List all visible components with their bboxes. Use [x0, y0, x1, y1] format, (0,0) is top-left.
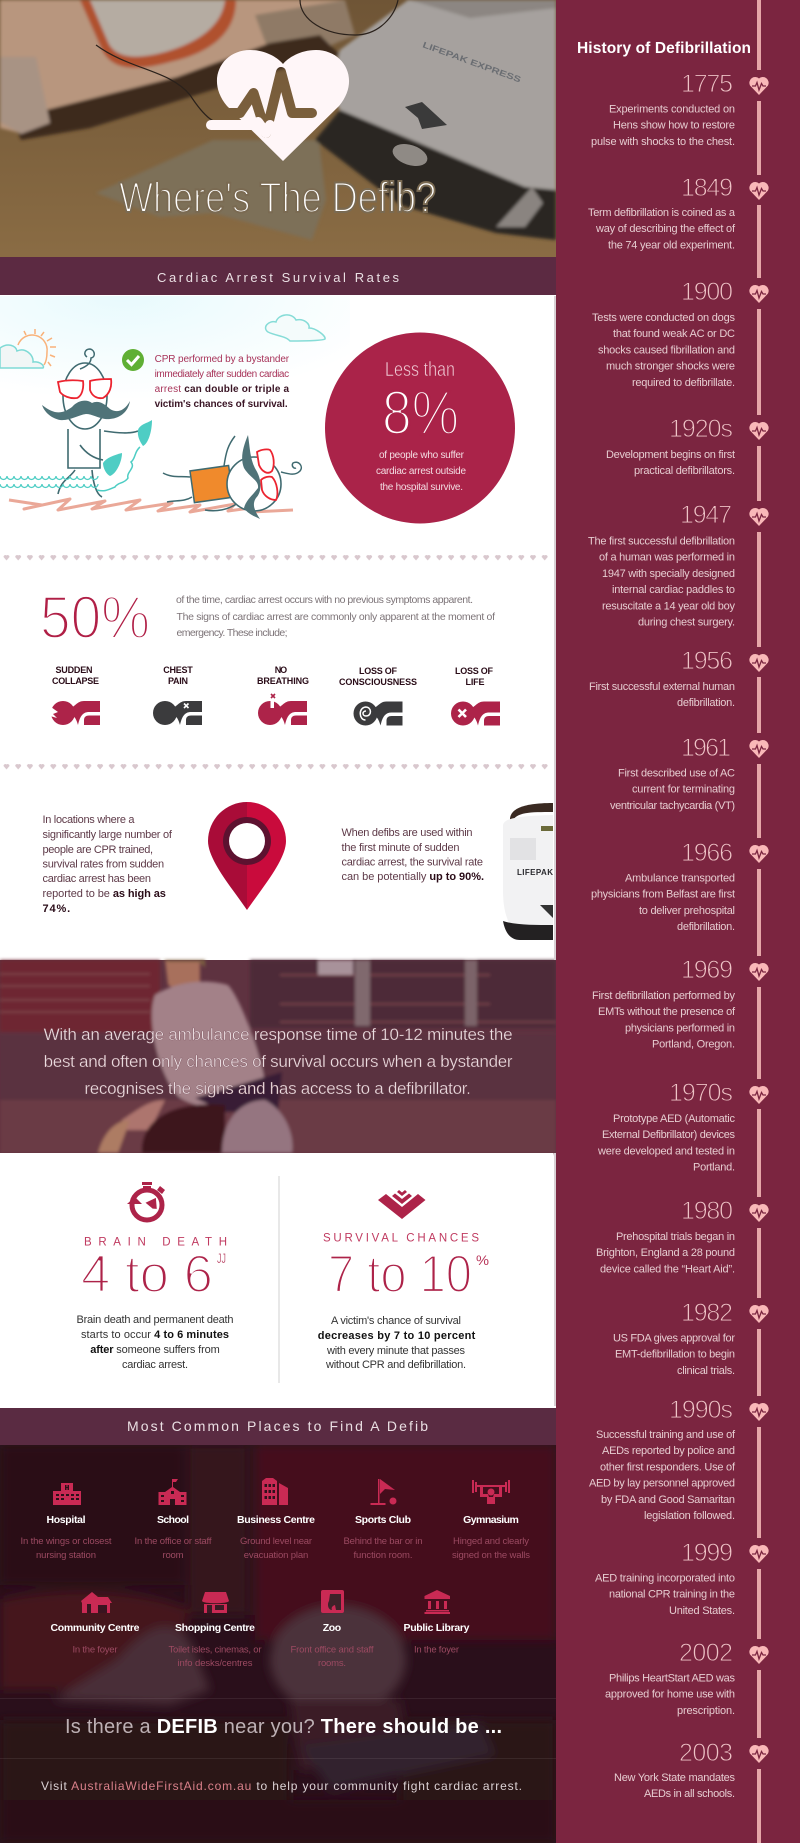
panel: ambulance response time with photo: recognises the signs and has access to a defibrillator. — [84, 1079, 471, 1098]
event: 1980: 1980 — [681, 1197, 733, 1225]
icon: school — [158, 1479, 186, 1505]
text: brain death description: Brain death and permanent death — [76, 1314, 234, 1326]
panel: most common places with photo — [0, 1445, 556, 1843]
text: CPR doubles or triples survival: CPR performed by a bystander — [155, 354, 290, 365]
icon: house — [81, 1592, 112, 1613]
event: 1966: 1966 — [681, 839, 733, 867]
event: 2002: prescription. — [677, 1705, 735, 1717]
event: 1961 — [610, 733, 769, 812]
text: CPR trained locations: cardiac arrest has been — [42, 873, 151, 885]
event: 1969: First defibrillation performed by — [592, 990, 736, 1002]
event: 1956: First successful external human — [589, 681, 735, 693]
event: 2002: approved for home use with — [605, 1689, 735, 1701]
text: CPR trained locations: survival rates from sudden — [42, 858, 164, 870]
event: 1970s: Prototype AED (Automatic — [613, 1113, 736, 1125]
timeline line — [757, 0, 761, 1843]
event: 1947: internal cardiac paddles to — [612, 584, 735, 596]
event: 1920s — [606, 415, 769, 477]
event: 1969: EMTs without the presence of — [598, 1006, 736, 1018]
event: 1961: ventricular tachycardia (VT) — [610, 800, 735, 812]
icon: weightlifter — [472, 1480, 510, 1504]
heading: survival chances: SURVIVAL CHANCES — [323, 1233, 479, 1245]
event: 1775: Experiments conducted on — [609, 104, 735, 116]
stat circle: less than 8% — [325, 332, 515, 524]
panel: survival chances — [278, 1153, 553, 1406]
place: shopping centre: Toilet isles, cinemas, or — [168, 1644, 262, 1656]
stat: 4 to 6: JJ — [217, 1250, 226, 1266]
text: 50 percent description: of the time, cardiac arrest occurs with no previous symptoms apparent. — [176, 594, 473, 606]
heading: brain death: BRAIN DEATH — [84, 1237, 227, 1249]
place: shopping centre: info desks/centres — [178, 1658, 253, 1669]
event: 1920s: Development begins on first — [606, 449, 735, 461]
event: 1970s: Portland. — [693, 1162, 735, 1174]
place: school — [134, 1479, 212, 1561]
event: 1982: 1982 — [681, 1299, 733, 1327]
icon: elephant — [321, 1590, 344, 1613]
place: business centre: evacuation plan — [244, 1550, 308, 1561]
stat circle: less than 8%: cardiac arrest outside — [376, 466, 466, 477]
text: survival chances description: without CPR and defibrillation. — [325, 1359, 466, 1371]
symptom: loss of life: LOSS OF — [455, 666, 494, 676]
place: community centre — [50, 1592, 140, 1656]
place: hospital: In the wings or closest — [20, 1536, 112, 1547]
text: survival chances description: decreases by 7 to 10 percent — [318, 1330, 476, 1342]
stat circle: less than 8%: 8% — [382, 379, 459, 448]
event: 1990s: AEDs reported by police and — [602, 1445, 735, 1457]
event: 1947: of a human was performed in — [599, 552, 735, 564]
event: 1947: resuscitate a 14 year old boy — [602, 600, 736, 612]
text: CPR trained locations: In locations where a — [42, 814, 135, 826]
event: 1999: AED training incorporated into — [595, 1572, 735, 1584]
event: 1947: during chest surgery. — [638, 616, 735, 628]
event: 1982: US FDA gives approval for — [613, 1332, 735, 1344]
icon: golf flag — [370, 1479, 396, 1505]
text: brain death description — [76, 1314, 234, 1371]
figure: standing rescuer — [0, 349, 152, 497]
text: CPR trained locations: people are CPR trained, — [42, 844, 153, 856]
text: defib within first minute: When defibs are used within — [342, 827, 472, 839]
event: 1990s — [589, 1396, 769, 1522]
panel: warning signs — [40, 584, 500, 726]
event: 2002 — [605, 1639, 769, 1717]
event: 1990s: legislation followed. — [644, 1510, 735, 1522]
text: 50 percent description — [176, 594, 495, 639]
event: 1849: Term defibrillation is coined as a — [588, 207, 736, 219]
stat: 50%: 50% — [40, 584, 150, 651]
stat circle: less than 8%: Less than — [385, 359, 455, 381]
event: 1849: 1849 — [681, 174, 733, 202]
symptom: loss of consciousness — [339, 666, 417, 726]
panel: history of defibrillation — [554, 0, 800, 1843]
text: CPR trained locations — [42, 814, 173, 915]
text: defib within first minute: can be potentially up to 90%. — [342, 871, 484, 883]
icon: office building — [262, 1478, 288, 1505]
event: 1990s: 1990s — [669, 1396, 733, 1424]
event: 1961: current for terminating — [632, 784, 735, 796]
event: 1969: 1969 — [681, 956, 733, 984]
event: 1775: Hens show how to restore — [613, 120, 735, 132]
text: defib within first minute — [342, 827, 484, 883]
event: 1947: 1947 — [680, 501, 732, 529]
header photo: defibrillator and training mannequin — [0, 0, 556, 257]
illustration: bystander performing CPR with defibrillator paddles — [0, 315, 325, 519]
place: public library: In the foyer — [414, 1644, 459, 1656]
event: 1999: 1999 — [681, 1539, 733, 1567]
band: cardiac arrest survival rates: Cardiac Arrest Survival Rates — [157, 270, 400, 285]
event: 1956: 1956 — [681, 647, 733, 675]
place: business centre: Ground level near — [240, 1536, 312, 1547]
event: 1970s — [597, 1079, 769, 1174]
stat circle: less than 8%: the hospital survive. — [380, 482, 463, 493]
event: 1775: 1775 — [681, 70, 733, 98]
event: 1980: Prehospital trials began in — [616, 1231, 735, 1243]
symptom: chest pain: PAIN — [168, 676, 188, 686]
text: CPR doubles or triples survival: arrest can double or triple a — [155, 384, 290, 395]
symptom: loss of consciousness: LOSS OF — [359, 666, 398, 676]
symptom: no breathing — [257, 665, 309, 725]
place: school: School — [157, 1514, 189, 1526]
symptom: loss of life — [451, 666, 500, 726]
event: 1990s: Successful training and use of — [596, 1429, 736, 1441]
place: school: In the office or staff — [134, 1536, 212, 1547]
text: brain death description: cardiac arrest. — [122, 1359, 188, 1371]
place: zoo: rooms. — [318, 1658, 346, 1669]
event: 1961: 1961 — [681, 734, 731, 762]
place: sports club: function room. — [354, 1550, 412, 1561]
heart dividers — [0, 553, 553, 773]
panel: ambulance response time with photo: best and often only chances of survival occurs when a bystander — [44, 1052, 513, 1071]
event: 1969: physicians performed in — [625, 1022, 735, 1034]
icon: hospital — [53, 1483, 81, 1505]
panel: ambulance response time with photo: With an average ambulance response time of 10-12 minutes the — [44, 1025, 513, 1044]
event: 1956 — [589, 647, 769, 709]
text: CPR doubles or triples survival: immediately after sudden cardiac — [155, 369, 289, 380]
event: 1990s: AED by lay personnel approved — [589, 1478, 735, 1490]
event: 1947: The first successful defibrillation — [588, 536, 735, 548]
place: public library: Public Library — [404, 1622, 470, 1634]
symptom: chest pain: CHEST — [163, 665, 193, 675]
text: 50 percent description: The signs of cardiac arrest are commonly only apparent at the moment of — [176, 611, 495, 623]
event: 1980 — [596, 1197, 769, 1275]
figure: collapsed victim — [163, 435, 301, 519]
text: CPR trained locations: 74%. — [42, 903, 70, 915]
band: cardiac arrest survival rates — [0, 257, 556, 295]
place: zoo: Zoo — [323, 1622, 341, 1634]
place: public library — [404, 1590, 470, 1656]
event: 1900: Tests were conducted on dogs — [592, 312, 736, 324]
event: 2003 — [614, 1738, 769, 1800]
stat: 7 to 10 percent: 7 to 10 — [328, 1245, 472, 1304]
event: 1982: EMT-defibrillation to begin — [615, 1349, 735, 1361]
event: 1961: First described use of AC — [618, 768, 735, 780]
place: hospital: nursing station — [36, 1550, 96, 1561]
place: zoo: Front office and staff — [290, 1644, 374, 1656]
text: CPR doubles or triples survival — [155, 354, 290, 410]
stat: 7 to 10 percent: % — [476, 1252, 489, 1268]
event: 1966: Ambulance transported — [625, 872, 735, 884]
event: 1982: clinical trials. — [677, 1365, 735, 1377]
event: 1999: national CPR training in the — [609, 1589, 735, 1601]
event: 1849: way of describing the effect of — [595, 223, 736, 235]
event: 1966 — [591, 838, 769, 933]
event: 1775 — [591, 70, 769, 148]
symptom: no breathing: BREATHING — [257, 676, 309, 686]
header photo: defibrillator and training mannequin: LIFEPAK EXPRESS — [421, 39, 523, 85]
event: 1970s: External Defibrillator) devices — [602, 1129, 736, 1141]
event: 1970s: 1970s — [669, 1079, 733, 1107]
symptom: sudden collapse: SUDDEN — [56, 665, 92, 675]
icon: shop — [202, 1592, 229, 1613]
icon: cloud — [266, 315, 325, 341]
place: shopping centre: Shopping Centre — [175, 1622, 255, 1634]
text: survival chances description: with every minute that passes — [326, 1345, 466, 1357]
place: gymnasium: Gymnasium — [463, 1514, 519, 1526]
text: brain death description: starts to occur 4 to 6 minutes — [81, 1329, 229, 1341]
text: defib within first minute: cardiac arrest, the survival rate — [342, 856, 483, 868]
footer: website invitation: Visit AustraliaWideFirstAid.com.au to help your community fight cardiac arrest. — [41, 1779, 522, 1793]
text: defib within first minute: the first minute of sudden — [342, 842, 460, 854]
event: 2003: 2003 — [679, 1739, 733, 1767]
place: community centre: In the foyer — [72, 1644, 118, 1656]
symptom: no breathing: NO — [275, 665, 287, 675]
event: 1920s: 1920s — [669, 415, 733, 443]
icon: library columns — [424, 1590, 450, 1614]
text: CPR trained locations: significantly large number of — [42, 829, 173, 841]
event: 1947: 1947 with specially designed — [602, 568, 735, 580]
symptom: loss of life: LIFE — [466, 677, 484, 687]
event: 1969 — [592, 956, 769, 1051]
event: 1990s: other first responders. Use of — [600, 1461, 736, 1473]
event: 1900: much stronger shocks were — [606, 361, 735, 373]
stat circle: less than 8%: of people who suffer — [379, 450, 465, 461]
place: sports club: Sports Club — [355, 1514, 411, 1526]
event: 1980: device called the “Heart Aid”. — [600, 1263, 735, 1275]
event: 1966: to deliver prehospital — [639, 905, 735, 917]
icon: map pin — [208, 802, 286, 910]
place: sports club: Behind the bar or in — [344, 1536, 422, 1547]
event: 1849: the 74 year old experiment. — [608, 239, 735, 251]
text: CPR doubles or triples survival: victim's chances of survival. — [155, 399, 288, 410]
event: 1900: required to defibrillate. — [632, 377, 735, 389]
symptom: sudden collapse: COLLAPSE — [52, 676, 99, 686]
event: 2003: AEDs in all schools. — [644, 1788, 735, 1800]
illustration: Lifepak defibrillator — [503, 803, 553, 940]
symptom: chest pain — [153, 665, 202, 725]
event: 2002: Philips HeartStart AED was — [609, 1672, 736, 1684]
text: 50 percent description: emergency. These include; — [176, 627, 288, 639]
panel: locations and defib use — [42, 802, 553, 940]
text: CPR trained locations: reported to be as high as — [42, 888, 166, 900]
panel: brain death — [0, 1153, 279, 1406]
event: 1999: United States. — [669, 1605, 735, 1617]
icon: sun and cloud — [0, 329, 56, 368]
event: 1982 — [613, 1298, 769, 1377]
event: 1956: defibrillation. — [677, 697, 735, 709]
stat: 4 to 6: 4 to 6 — [81, 1245, 213, 1304]
symptom: sudden collapse — [50, 665, 100, 725]
icon: green check — [122, 349, 144, 371]
event: 2002: 2002 — [679, 1639, 733, 1667]
event: 1900: that found weak AC or DC — [613, 328, 735, 340]
place: gymnasium: signed on the walls — [452, 1550, 530, 1561]
event: 1920s: practical defibrillators. — [634, 465, 735, 477]
illustration: Lifepak defibrillator: LIFEPAK — [517, 868, 553, 877]
place: gymnasium: Hinged and clearly — [453, 1536, 529, 1547]
place: sports club — [344, 1479, 422, 1561]
place: hospital — [20, 1483, 112, 1561]
event: 1990s: by FDA and Good Samaritan — [601, 1494, 735, 1506]
event: 1900: shocks caused fibrillation and — [598, 344, 735, 356]
event: 1980: Brighton, England a 28 pound — [596, 1247, 735, 1259]
heading: history of defibrillation: History of Defibrillation — [577, 40, 751, 57]
event: 1969: Portland, Oregon. — [652, 1039, 735, 1051]
place: business centre: Business Centre — [237, 1514, 315, 1526]
title: Where's The Defib? — [119, 174, 436, 222]
panel: ambulance response time with photo — [0, 960, 556, 1153]
event: 1970s: were developed and tested in — [597, 1145, 735, 1157]
event: 1966: defibrillation. — [677, 921, 735, 933]
place: school: room — [162, 1550, 184, 1561]
place: zoo — [290, 1590, 374, 1669]
text: survival chances description: A victim's chance of survival — [331, 1315, 461, 1327]
event: 1966: physicians from Belfast are first — [591, 889, 735, 901]
band: most common places heading: Most Common Places to Find A Defib — [127, 1418, 428, 1434]
place: business centre — [237, 1478, 315, 1561]
event: 1900 — [592, 278, 769, 389]
event: 1947 — [588, 501, 769, 628]
event: 1900: 1900 — [681, 278, 733, 306]
band: most common places heading — [0, 1408, 556, 1445]
call to action: is there a defib near you: Is there a DEFIB near you? There should be ... — [65, 1716, 502, 1738]
icon: heart with pulse line — [211, 50, 349, 161]
icon: stacked chevrons — [378, 1190, 426, 1219]
event: 1999 — [595, 1538, 769, 1617]
icon: stopwatch — [127, 1182, 165, 1220]
floor scribble — [9, 499, 293, 512]
event: 2003: New York State mandates — [614, 1772, 736, 1784]
text: survival chances description — [318, 1315, 476, 1371]
place: shopping centre — [168, 1592, 262, 1669]
event: 1849 — [588, 174, 769, 251]
text: brain death description: after someone suffers from — [90, 1344, 220, 1356]
event: 1775: pulse with shocks to the chest. — [591, 136, 735, 148]
place: hospital: Hospital — [46, 1514, 86, 1526]
panel: survival rates — [0, 296, 553, 558]
place: gymnasium — [452, 1480, 530, 1561]
place: community centre: Community Centre — [50, 1622, 140, 1634]
symptom: loss of consciousness: CONSCIOUSNESS — [339, 677, 417, 687]
